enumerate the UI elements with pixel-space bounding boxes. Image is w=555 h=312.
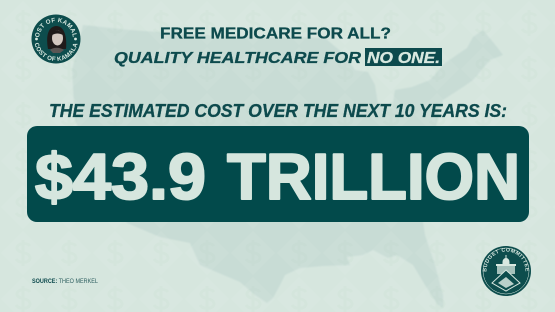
headline line 1: FREE MEDICARE FOR ALL? bbox=[160, 26, 391, 42]
header: logo Cost of Kamala bbox=[32, 14, 80, 64]
portrait bbox=[47, 26, 66, 53]
big number: $43.9 bbox=[35, 140, 206, 213]
big number: TRILLION bbox=[227, 140, 520, 213]
panel: total cost bbox=[27, 126, 529, 222]
big number bbox=[35, 140, 520, 213]
logo: Budget Committee: BUDGET COMMITTEE bbox=[482, 248, 530, 272]
headline line 2: QUALITY HEALTHCARE FOR bbox=[114, 50, 361, 67]
source: SOURCE: THEO MERKEL bbox=[32, 279, 99, 285]
badge text bottom: COST OF KAMALA bbox=[34, 42, 78, 61]
icon: capitol bbox=[492, 255, 520, 291]
highlight: no one: NO ONE. bbox=[367, 50, 440, 67]
US map silhouette bbox=[72, 25, 503, 308]
logo: Budget Committee bbox=[481, 246, 531, 296]
headline line 2 bbox=[114, 48, 442, 67]
subheading: THE ESTIMATED COST OVER THE NEXT 10 YEARS IS: bbox=[49, 101, 507, 121]
